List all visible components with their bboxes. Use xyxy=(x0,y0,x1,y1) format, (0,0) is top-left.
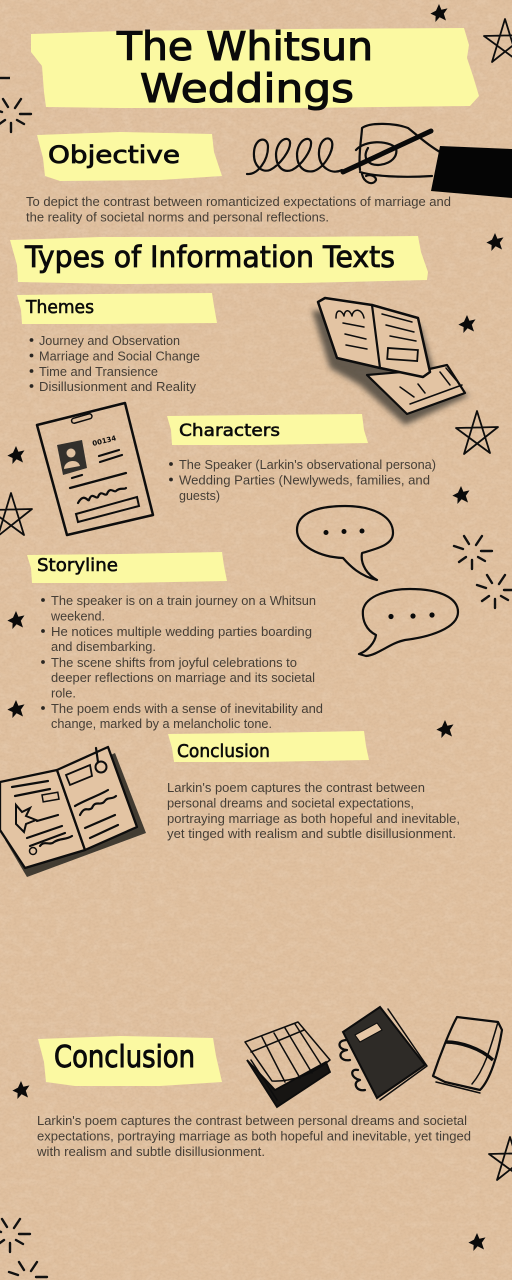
storyline heading xyxy=(27,552,227,583)
themes list: Journey and Observation xyxy=(39,334,180,348)
objective text xyxy=(26,195,451,224)
title: Weddings xyxy=(140,67,354,112)
objective text: To depict the contrast between romanticized expectations of marriage and xyxy=(26,195,451,209)
storyline list: The poem ends with a sense of inevitability and xyxy=(51,702,323,716)
storyline heading: Storyline xyxy=(37,555,118,576)
characters list: Wedding Parties (Newlyweds, families, and xyxy=(179,474,430,488)
small conclusion text: Larkin's poem captures the contrast between xyxy=(167,781,425,795)
small conclusion heading: Conclusion xyxy=(177,741,270,762)
objective heading xyxy=(37,132,222,181)
themes heading: Themes xyxy=(25,297,94,318)
bottom conclusion heading xyxy=(38,1036,222,1086)
small conclusion text: portraying marriage as both hopeful and inevitable, xyxy=(167,812,460,826)
objective text: the reality of societal norms and personal reflections. xyxy=(26,210,329,224)
bottom conclusion text xyxy=(36,1114,471,1159)
icon: speech bubble bottom xyxy=(359,589,458,656)
bottom conclusion text: expectations, portraying marriage as both hopeful and inevitable, yet tinged xyxy=(37,1130,471,1144)
storyline list: weekend. xyxy=(50,610,105,624)
characters list: guests) xyxy=(179,489,220,503)
themes list xyxy=(30,334,200,394)
storyline list: The scene shifts from joyful celebrations to xyxy=(51,656,297,670)
storyline list: deeper reflections on marriage and its societal xyxy=(51,671,315,685)
storyline list: and disembarking. xyxy=(51,640,156,654)
themes list: Time and Transience xyxy=(39,365,158,379)
bottom conclusion heading: Conclusion xyxy=(54,1040,195,1075)
icon: speech bubble top xyxy=(297,506,393,580)
panel: themes xyxy=(17,293,217,394)
title: The Whitsun xyxy=(116,25,373,70)
bottom conclusion text: with realism and subtle disillusionment. xyxy=(36,1145,265,1159)
themes list: Marriage and Social Change xyxy=(39,350,200,364)
section heading: types of information texts: Types of Information Texts xyxy=(24,240,395,274)
icon: dark spiral notebook xyxy=(339,1007,427,1100)
storyline list xyxy=(41,594,323,731)
characters heading xyxy=(167,414,368,445)
themes list: Disillusionment and Reality xyxy=(39,380,197,394)
characters list xyxy=(169,458,436,503)
icon: notepad xyxy=(245,1022,330,1107)
themes heading xyxy=(17,293,217,324)
panel: characters xyxy=(167,414,436,503)
small conclusion text: yet tinged with realism and subtle disillusionment. xyxy=(167,827,456,841)
storyline list: He notices multiple wedding parties boarding xyxy=(51,625,312,639)
small conclusion text xyxy=(167,781,460,841)
characters heading: Characters xyxy=(179,421,280,441)
small conclusion text: personal dreams and societal expectations, xyxy=(167,796,414,810)
panel: small conclusion xyxy=(167,731,460,841)
icon: hand writing with pen xyxy=(247,124,512,198)
storyline list: role. xyxy=(51,686,76,700)
section heading: types of information texts xyxy=(10,236,428,284)
small conclusion heading xyxy=(168,731,369,762)
icon: id card: 00134 xyxy=(92,434,117,448)
panel: storyline xyxy=(27,552,323,731)
icon: id card xyxy=(37,403,153,535)
icon: open notebook xyxy=(0,747,146,877)
icon: strapped book xyxy=(433,1017,502,1093)
characters list: The Speaker (Larkin's observational persona) xyxy=(179,458,436,472)
bottom conclusion text: Larkin's poem captures the contrast between personal dreams and societal xyxy=(37,1114,467,1128)
storyline list: The speaker is on a train journey on a Whitsun xyxy=(51,594,316,608)
objective heading: Objective xyxy=(48,141,180,169)
title xyxy=(31,25,479,112)
icon: open books xyxy=(312,298,470,425)
storyline list: change, marked by a melancholic tone. xyxy=(51,717,272,731)
